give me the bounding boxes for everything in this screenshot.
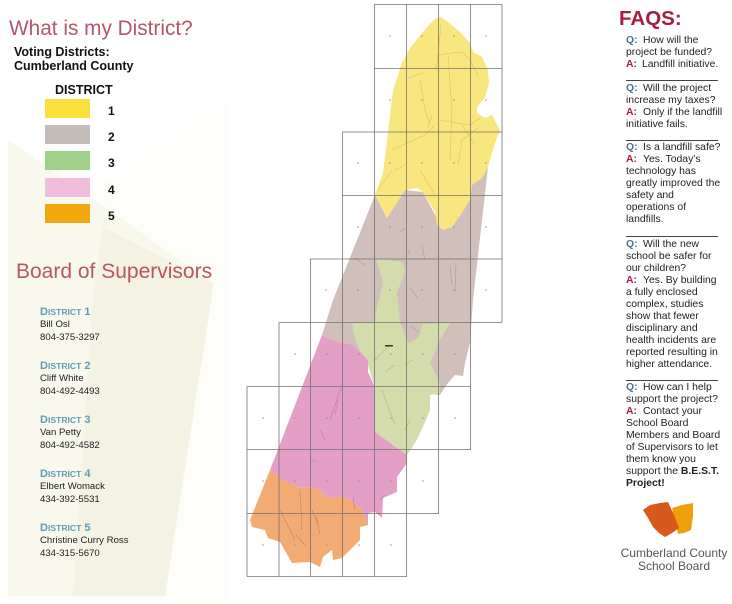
FAQ 5: Project!: [626, 478, 665, 489]
supervisor: district 2: DISTRICT 2: [40, 360, 91, 372]
legend item: district 2: 2: [108, 130, 115, 144]
map region: district 2: [322, 167, 488, 395]
FAQ 5: of Supervisors to let: [626, 442, 718, 453]
FAQ 5: them know you: [626, 454, 696, 465]
supervisor: district 5: [40, 522, 129, 559]
FAQ 3: landfills.: [626, 214, 664, 225]
FAQ 3: operations of: [626, 202, 686, 213]
map region: district 1: [375, 17, 500, 230]
FAQ 2: initiative fails.: [626, 119, 688, 130]
FAQ 4: [626, 239, 718, 370]
supervisor: district 5: Christine Curry Ross: [40, 535, 129, 546]
FAQ 4: A:: [626, 275, 637, 286]
FAQ 2: Will the project: [643, 83, 711, 94]
FAQ 2: A:: [626, 107, 637, 118]
FAQ 4: our children?: [626, 263, 686, 274]
FAQ 4: show that fewer: [626, 311, 699, 322]
subheading: voting districts: Cumberland County: [14, 59, 133, 73]
supervisor: district 4: DISTRICT 4: [40, 468, 91, 480]
FAQ 1: A:: [626, 59, 637, 70]
FAQ 1: How will the: [643, 35, 699, 46]
FAQ 1: Q:: [626, 35, 638, 46]
FAQ 1: [626, 35, 718, 70]
FAQ 5: School Board: [626, 418, 689, 429]
supervisor: district 4: 434-392-5531: [40, 494, 100, 505]
FAQ 3: Is a landfill safe?: [643, 142, 721, 153]
supervisor: district 4: [40, 468, 105, 505]
FAQ 4: a fully enclosed: [626, 287, 698, 298]
supervisor: district 3: DISTRICT 3: [40, 414, 91, 426]
supervisor: district 2: [40, 360, 100, 397]
FAQ 5: How can I help: [643, 382, 712, 393]
map region: district 4: [270, 335, 407, 525]
legend item: district 5: 5: [108, 209, 115, 223]
supervisor: district 4: Elbert Womack: [40, 481, 105, 492]
FAQ 3: safety and: [626, 190, 674, 201]
subheading: voting districts: Voting Districts:: [14, 45, 110, 59]
map region: district 3: [352, 259, 450, 455]
legend item: district 3: 3: [108, 156, 115, 170]
map grid centre dots: [262, 35, 487, 546]
map streams: [280, 25, 480, 545]
FAQ 5: [626, 382, 720, 489]
FAQ 4: disciplinary and: [626, 323, 698, 334]
FAQ 4: health incidents are: [626, 335, 716, 346]
background panel: left column shapes: [8, 100, 226, 601]
FAQ 3: A:: [626, 154, 637, 165]
FAQ 5: A:: [626, 406, 637, 417]
supervisor: district 3: [40, 414, 100, 451]
FAQ 2: Q:: [626, 83, 638, 94]
legend item: district 1: 1: [108, 104, 115, 118]
FAQ 5: Contact your: [643, 406, 702, 417]
FAQ 4: Q:: [626, 239, 638, 250]
supervisor: district 5: 434-315-5670: [40, 548, 100, 559]
map centre mark: [385, 345, 393, 346]
FAQ 2: increase my taxes?: [626, 95, 716, 106]
FAQ 5: Members and Board: [626, 430, 720, 441]
supervisor: district 1: [40, 306, 100, 343]
map grid: [247, 4, 502, 576]
map region: district 5: [250, 470, 368, 567]
FAQ 4: Will the new: [643, 239, 700, 250]
FAQ 3: greatly improved the: [626, 178, 720, 189]
FAQ 4: school be safer for: [626, 251, 712, 262]
FAQ 3: technology has: [626, 166, 696, 177]
FAQ 4: Yes. By building: [643, 275, 717, 286]
FAQ 2: Only if the landfill: [643, 107, 722, 118]
FAQ 3: Yes. Today’s: [643, 154, 701, 165]
FAQ 4: reported resulting in: [626, 347, 718, 358]
FAQ 1: Landfill initiative.: [642, 59, 718, 70]
FAQ 3: Q:: [626, 142, 638, 153]
heading: FAQS: FAQS:: [619, 7, 682, 30]
FAQ 5: support the B.E.S.T.: [626, 466, 719, 477]
supervisor: district 1: DISTRICT 1: [40, 306, 91, 318]
FAQ 5: Q:: [626, 382, 638, 393]
district map: [247, 4, 502, 576]
FAQ 5: support the project?: [626, 394, 718, 405]
legend item: district 4: 4: [108, 183, 115, 197]
map legend: [45, 83, 115, 223]
supervisor: district 1: 804-375-3297: [40, 332, 100, 343]
supervisor: district 2: 804-492-4493: [40, 386, 100, 397]
heading: What is my District?: What is my District?: [9, 17, 193, 40]
supervisor: district 3: 804-492-4582: [40, 440, 100, 451]
FAQ 2: [626, 83, 722, 130]
FAQ 4: higher attendance.: [626, 359, 712, 370]
supervisor: district 3: Van Petty: [40, 427, 81, 438]
supervisor: district 2: Cliff White: [40, 373, 84, 384]
logo text: Cumberland County School Board: School Board: [638, 559, 710, 573]
FAQ 1: project be funded?: [626, 47, 712, 58]
logo icon: [643, 502, 693, 537]
map legend: DISTRICT: [55, 83, 113, 97]
supervisor: district 5: DISTRICT 5: [40, 522, 91, 534]
FAQ 3: [626, 142, 721, 225]
FAQ 4: complex, studies: [626, 299, 703, 310]
FAQ list: [626, 35, 722, 489]
logo text: Cumberland County School Board: Cumberland County: [621, 546, 727, 560]
heading: Board of Supervisors: Board of Supervisors: [16, 260, 212, 283]
supervisor: district 1: Bill Osl: [40, 319, 70, 330]
supervisors list: [40, 306, 129, 559]
